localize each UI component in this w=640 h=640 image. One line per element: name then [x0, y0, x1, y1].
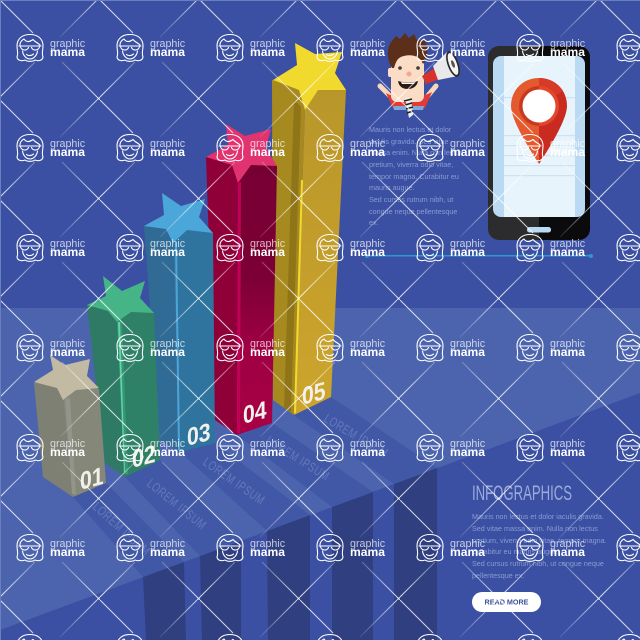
label: lorem ipsum 5: LOREM IPSUM: [321, 412, 390, 461]
watermark logos: graphic: [350, 238, 386, 250]
watermark logos: graphic: [150, 438, 186, 450]
text block: lower: Curabitur eu mauris augue.: [472, 547, 559, 556]
watermark logos: graphic: [450, 338, 486, 350]
text block: lower: pellentesque ex.: [472, 571, 524, 580]
hair: [388, 33, 427, 68]
text block: upper: massa enim. Nulla non lectus: [369, 148, 463, 157]
watermark logos: graphic: [350, 38, 386, 50]
watermark logos: graphic: [150, 138, 186, 150]
watermark logos: mama: [250, 145, 285, 159]
watermark logos: graphic: [50, 338, 86, 350]
text block: lower: pretium, viverra odio vitae, tempor magna.: [472, 536, 607, 545]
text block: lower: Sed vitae massa enim. Nulla non lectus: [472, 524, 598, 533]
watermark logos: mama: [550, 345, 585, 359]
number 05: 05: [302, 376, 326, 410]
tie: [405, 98, 413, 118]
watermark logos: mama: [50, 45, 85, 59]
watermark logos: graphic: [550, 138, 586, 150]
watermark logos: graphic: [450, 238, 486, 250]
megaphone: [422, 68, 440, 84]
watermark logos: mama: [350, 45, 385, 59]
watermark logos: mama: [50, 345, 85, 359]
bar 01 grey: [34, 355, 106, 497]
watermark logos: graphic: [350, 338, 386, 350]
watermark logos: mama: [150, 145, 185, 159]
watermark logos: graphic: [250, 338, 286, 350]
head: [391, 52, 424, 102]
watermark logos: mama: [550, 445, 585, 459]
star 03: [144, 193, 213, 243]
watermark logos: mama: [150, 545, 185, 559]
phone body: [488, 46, 590, 240]
heading: INFOGRAPHICS: [472, 482, 572, 505]
watermark logos: graphic: [150, 538, 186, 550]
floor panel: [0, 308, 640, 630]
torso: [386, 92, 432, 108]
watermark logos: mama: [50, 445, 85, 459]
watermark logos: mama: [150, 245, 185, 259]
watermark logos: graphic: [250, 138, 286, 150]
watermark logos: graphic: [50, 38, 86, 50]
watermark logos: mama: [250, 445, 285, 459]
watermark logos: graphic: [50, 538, 86, 550]
watermark logos: graphic: [250, 538, 286, 550]
arms: [380, 86, 436, 98]
watermark logos: mama: [350, 445, 385, 459]
star 04: [206, 124, 277, 183]
watermark logos: mama: [550, 545, 585, 559]
watermark logos: graphic: [250, 438, 286, 450]
watermark logos: graphic: [50, 238, 86, 250]
watermark logos: graphic: [250, 38, 286, 50]
label: lorem ipsum 4: LOREM IPSUM: [263, 434, 332, 484]
watermark logos: mama: [450, 245, 485, 259]
watermark logos: mama: [450, 545, 485, 559]
watermark logos: graphic: [350, 138, 386, 150]
bar 02 green: [87, 276, 160, 477]
text block: upper: Mauris non lectus et dolor: [369, 125, 452, 134]
watermark logos: graphic: [450, 538, 486, 550]
text block: upper: pretium, viverra odio vitae,: [369, 160, 453, 169]
read more button: [472, 592, 541, 612]
number 03: 03: [187, 417, 211, 451]
watermark logos: mama: [250, 45, 285, 59]
watermark logos: graphic: [150, 38, 186, 50]
text block: upper: ex.: [369, 218, 379, 227]
watermark logos: graphic: [550, 238, 586, 250]
label: lorem ipsum 3: LOREM IPSUM: [200, 456, 267, 508]
phone button: [527, 227, 551, 232]
columns below floor edge: [143, 468, 437, 640]
bar 03 blue: [144, 193, 215, 452]
number 01: 01: [80, 461, 104, 495]
label: lorem ipsum 1: LOREM IPSUM: [90, 500, 152, 559]
watermark logos: mama: [50, 145, 85, 159]
watermark logos: mama: [250, 345, 285, 359]
text block: lower: [472, 512, 607, 580]
watermark logos: mama: [450, 445, 485, 459]
watermark logos: mama: [150, 45, 185, 59]
phone screen: [493, 56, 585, 217]
watermark logos: graphic: [350, 438, 386, 450]
watermark logos: graphic: [450, 438, 486, 450]
text block: upper: iaculis gravida. Sed vitae: [369, 137, 449, 146]
watermark logos: mama: [550, 145, 585, 159]
watermark logos: mama: [350, 345, 385, 359]
watermark logos: graphic: [450, 138, 486, 150]
star 05: [273, 43, 346, 110]
text block: upper: congue neque pellentesque: [369, 207, 457, 216]
watermark logos: graphic: [550, 538, 586, 550]
text block: lower: Mauris non lectus et dolor iaculis gravida.: [472, 512, 604, 521]
text block: upper: tempor magna. Curabitur eu: [369, 172, 459, 181]
watermark logos: graphic: [250, 238, 286, 250]
watermark logos: mama: [150, 345, 185, 359]
watermark logos: graphic: [550, 338, 586, 350]
bar 04 crimson: [206, 124, 277, 435]
text block: upper: [369, 125, 463, 227]
bar 05 gold: [272, 43, 346, 415]
character with megaphone: [380, 33, 463, 118]
watermark logos: mama: [450, 45, 485, 59]
number 02: 02: [132, 439, 156, 473]
location pin: [511, 78, 539, 164]
watermark logos: mama: [50, 245, 85, 259]
watermark logos: graphic: [550, 38, 586, 50]
star 01: [34, 355, 99, 400]
floor shadows with labels: [73, 397, 437, 577]
watermark logos: mama: [250, 545, 285, 559]
watermark logos: mama: [350, 245, 385, 259]
watermark logos: graphic: [50, 138, 86, 150]
text block: lower: Sed cursus rutrum nibh, ut congue neque: [472, 559, 604, 568]
watermark logos: mama: [550, 45, 585, 59]
watermark logos: graphic: [550, 438, 586, 450]
read more button: READ MORE: [485, 598, 529, 606]
star 02: [87, 276, 154, 322]
watermark logos: mama: [450, 145, 485, 159]
label: lorem ipsum 2: LOREM IPSUM: [144, 477, 208, 533]
watermark logos: mama: [350, 145, 385, 159]
watermark logos: mama: [450, 345, 485, 359]
watermark logos: graphic: [50, 438, 86, 450]
watermark logos: mama: [150, 445, 185, 459]
watermark logos: graphic: [150, 238, 186, 250]
watermark logos: mama: [350, 545, 385, 559]
phone with location pin: [488, 46, 590, 240]
watermark logos: mama: [50, 545, 85, 559]
text block: upper: mauris augue.: [369, 183, 415, 192]
watermark logos: mama: [550, 245, 585, 259]
watermark logos: mama: [250, 245, 285, 259]
number 04: 04: [243, 395, 267, 429]
watermark logos: graphic: [450, 38, 486, 50]
face: [398, 66, 402, 70]
text block: upper: Sed cursus rutrum nibh, ut: [369, 195, 453, 204]
divider line with dots: [365, 254, 593, 258]
watermark logos: graphic: [150, 338, 186, 350]
watermark logos: graphic: [350, 538, 386, 550]
